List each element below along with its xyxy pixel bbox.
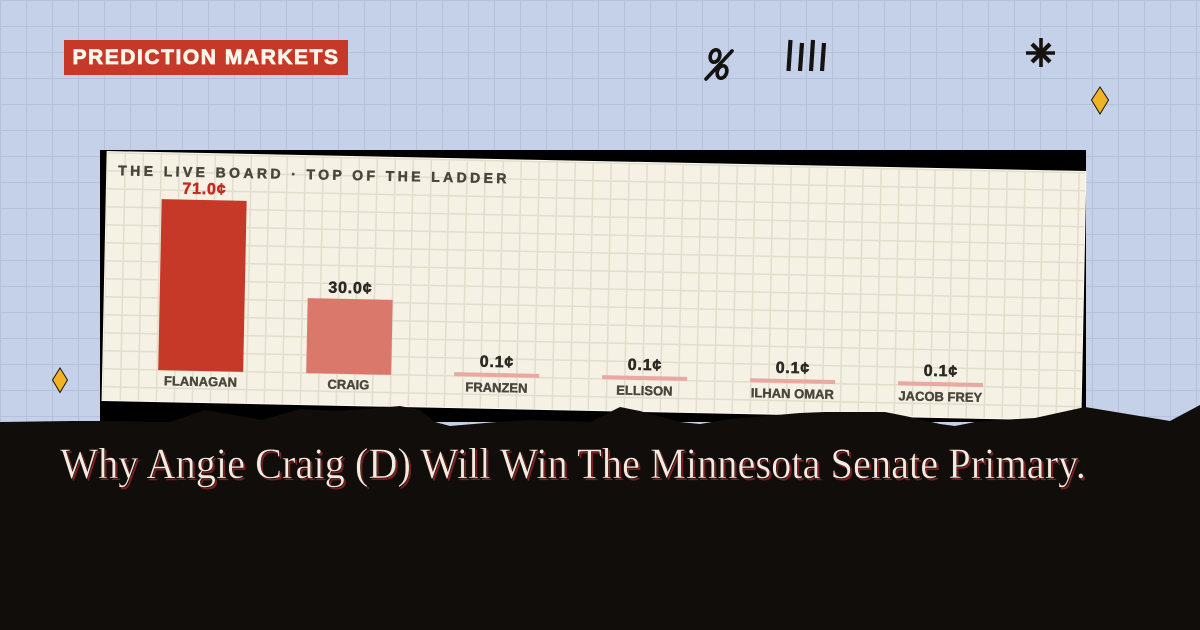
panel: live board [102, 152, 1085, 420]
label: Ilhan Omar: ILHAN OMAR [750, 385, 834, 402]
bar: Ellison [602, 375, 687, 381]
bar: Ilhan Omar [750, 378, 835, 384]
board heading: THE LIVE BOARD · TOP OF THE LADDER [118, 162, 510, 186]
label: Jacob Frey: JACOB FREY [898, 388, 982, 405]
bar: Craig [306, 298, 392, 375]
value: Ilhan Omar: 0.1¢ [775, 360, 810, 377]
headline: Why Angie Craig (D) Will Win The Minnesota Senate Primary. [60, 440, 1086, 488]
label: Franzen: FRANZEN [465, 379, 527, 396]
value: Franzen: 0.1¢ [479, 354, 514, 371]
icon: asterisk [1026, 38, 1055, 67]
bar: Flanagan [158, 199, 246, 372]
card backing [100, 150, 1086, 422]
column: Craig [306, 280, 393, 392]
bar: Franzen [454, 372, 539, 378]
column: Ellison [602, 357, 688, 399]
torn dark footer [0, 405, 1200, 630]
column: Jacob Frey [898, 363, 984, 405]
icon: tally marks [786, 40, 826, 72]
value: Craig: 30.0¢ [328, 280, 372, 297]
column: Franzen [454, 354, 540, 396]
value: Jacob Frey: 0.1¢ [923, 363, 958, 380]
tag: prediction markets: PREDICTION MARKETS [72, 46, 340, 69]
tag: prediction markets [64, 40, 348, 75]
column: Ilhan Omar [750, 360, 836, 402]
value: Flanagan: 71.0¢ [182, 181, 226, 198]
label: Ellison: ELLISON [616, 382, 672, 399]
label: Flanagan: FLANAGAN [163, 373, 237, 390]
column: Flanagan [158, 181, 247, 390]
label: Craig: CRAIG [327, 377, 369, 392]
value: Ellison: 0.1¢ [627, 357, 662, 374]
icon: percent sign [704, 48, 734, 81]
icon: gold diamond left [52, 367, 68, 394]
icon: gold diamond right [1091, 86, 1109, 115]
bar: Jacob Frey [898, 381, 983, 387]
